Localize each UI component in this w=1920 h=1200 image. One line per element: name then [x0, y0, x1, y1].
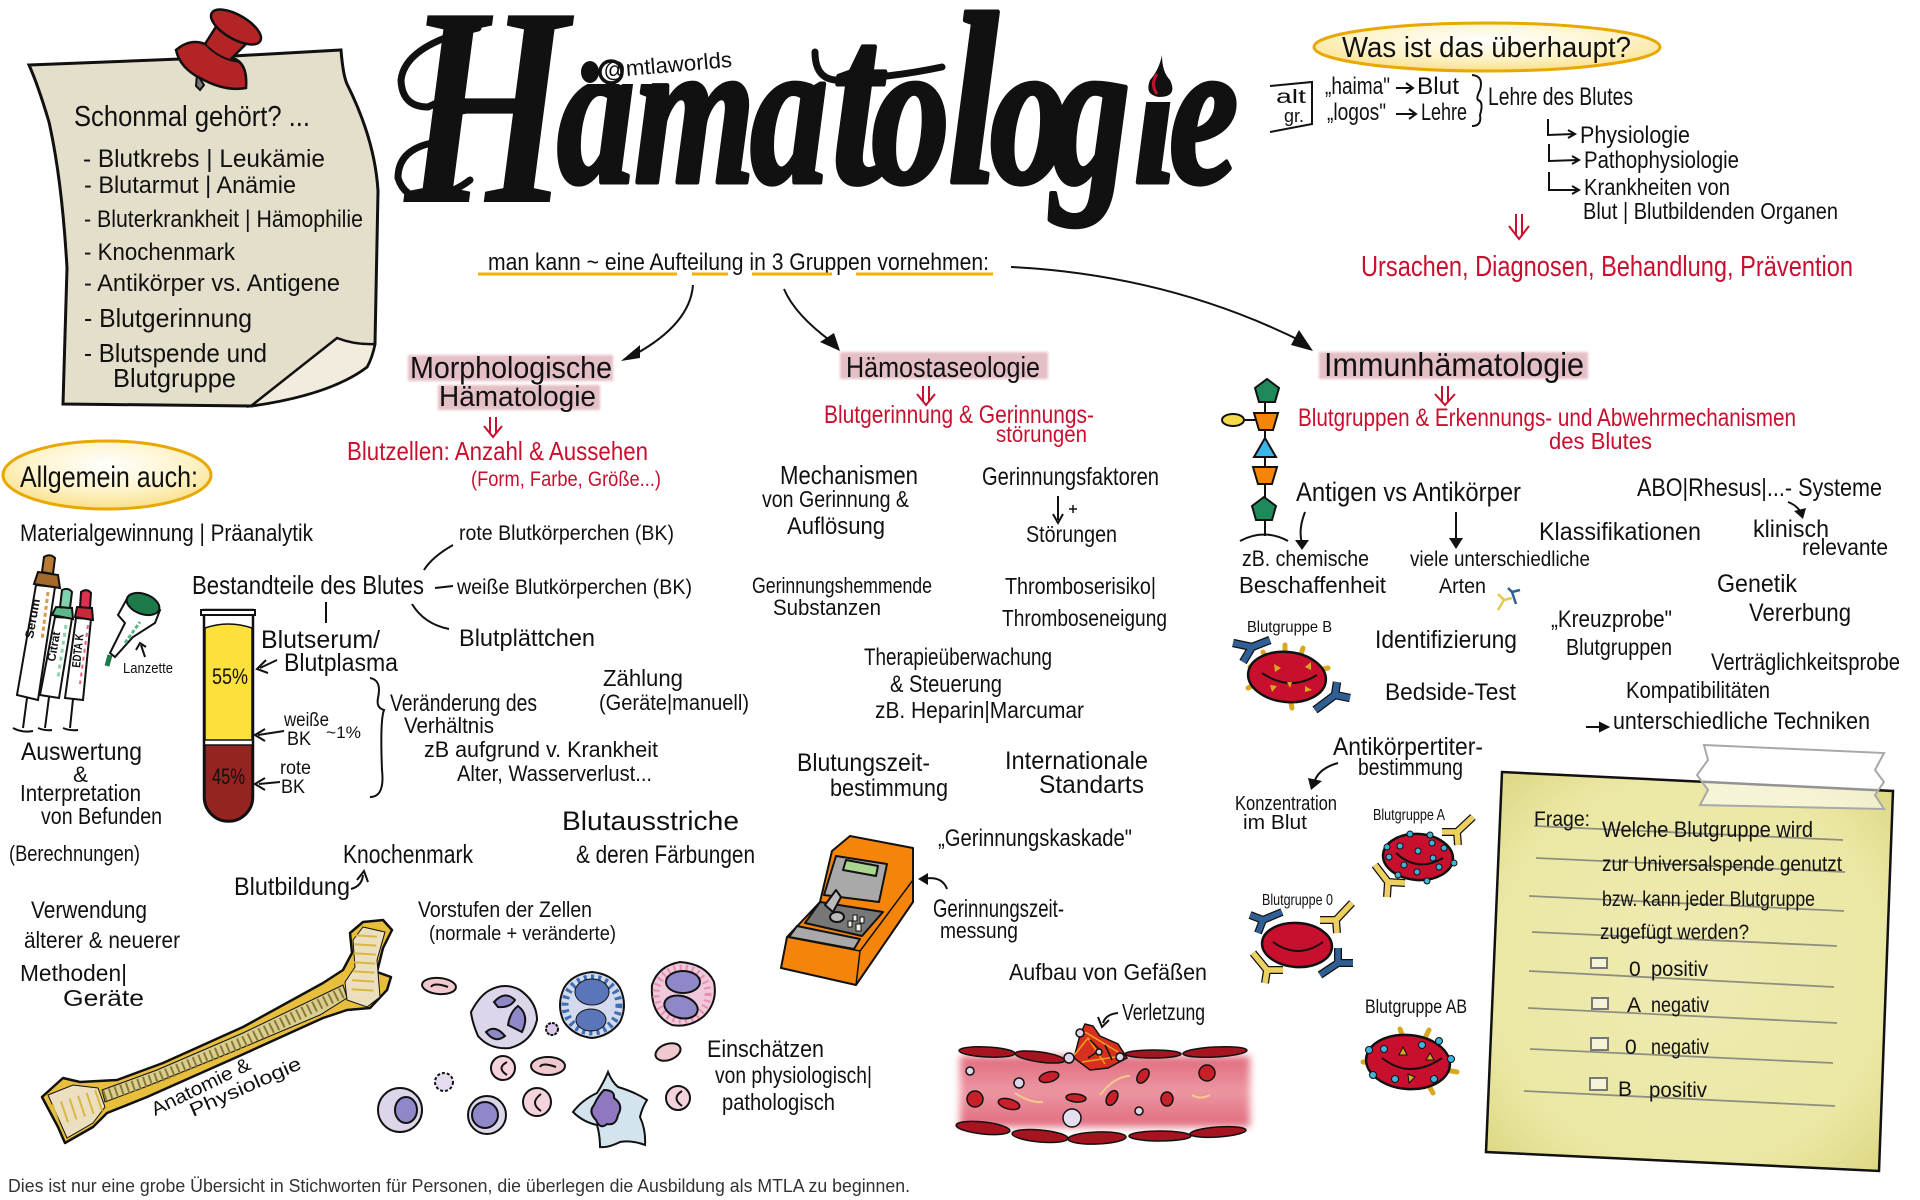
cell: platelet small	[546, 1023, 558, 1035]
Einschätzen	[707, 1036, 872, 1115]
Zählung	[599, 665, 749, 715]
Konzentration im Blut: Konzentration	[1235, 793, 1337, 815]
Klassifikationen: Klassifikationen	[1539, 518, 1701, 546]
note sheet	[1486, 772, 1893, 1171]
answer: 0 positiv: 0	[1629, 958, 1641, 981]
Antikörpertiter: bestimmung	[1358, 754, 1463, 780]
blood group B: Blutgruppe B	[1247, 619, 1332, 636]
klinisch relevante: relevante	[1802, 534, 1888, 560]
paper sheet	[29, 50, 378, 406]
Therapieüberwachung: & Steuerung	[890, 671, 1002, 698]
Gerinnungshemmende: Substanzen	[773, 595, 881, 620]
icon: blood test tube: 45%	[212, 764, 245, 789]
note list: - Blutarmut | Anämie	[84, 172, 296, 199]
Blutausstriche: Blutausstriche	[562, 806, 739, 836]
tube labels: ~1%	[326, 723, 361, 742]
blood components: weiße Blutkörperchen (BK)	[456, 576, 692, 599]
panel: question oval: Was ist das überhaupt?	[1342, 32, 1631, 64]
word logos	[1327, 99, 1467, 126]
branch list	[1548, 119, 1838, 224]
title: ogie	[990, 0, 1238, 227]
box alt gr: alt	[1276, 87, 1307, 108]
Einschätzen: Einschätzen	[707, 1036, 824, 1063]
blood components: rote Blutkörperchen (BK)	[459, 522, 674, 545]
question	[1534, 808, 1842, 944]
cell: lymphocyte 2	[468, 1096, 506, 1134]
Auswertung	[9, 738, 162, 866]
cell: lymphocyte	[378, 1088, 422, 1132]
note list	[83, 145, 363, 393]
tube Serum	[13, 555, 60, 732]
answer: A negativ: A	[1627, 994, 1641, 1017]
brace	[1472, 75, 1482, 126]
tube labels: Blutserum/	[261, 626, 380, 654]
cell: pink granulocyte	[652, 962, 715, 1026]
icon: push pin	[176, 3, 266, 90]
word logos: „logos"	[1327, 99, 1386, 126]
note list: - Blutkrebs | Leukämie	[83, 145, 325, 173]
tube labels	[255, 626, 398, 798]
Gerinnungsfaktoren: Gerinnungsfaktoren	[982, 463, 1159, 491]
red subtitle: (Form, Farbe, Größe...)	[471, 468, 661, 491]
Konzentration im Blut	[1235, 793, 1337, 834]
note heading: Schonmal gehört? ...	[74, 101, 310, 133]
answer: B positiv: B	[1618, 1078, 1632, 1101]
Gerinnungshemmende: Gerinnungshemmende	[752, 573, 932, 598]
panel: note Schonmal gehört	[29, 3, 378, 406]
answer: 0 negativ: negativ	[1651, 1036, 1709, 1059]
tube labels: Blutplasma	[284, 649, 398, 677]
column: Immunhämatologie	[8, 346, 1900, 1196]
footer note: Dies ist nur eine grobe Übersicht in Stichworten für Personen, die überlegen die Ausbildung als MTLA zu beginnen.	[8, 1176, 910, 1196]
bone label: Anatomie &	[148, 1054, 255, 1120]
arrow to Immunhämatologie	[1011, 267, 1313, 351]
Verletzung	[1098, 999, 1205, 1027]
Veränderung: Verhältnis	[404, 713, 494, 738]
answer: B positiv	[1590, 1078, 1707, 1102]
red subtitle	[824, 401, 1094, 447]
Verwendung: älterer & neuerer	[24, 927, 180, 953]
arrows down	[1295, 512, 1463, 550]
heading	[408, 350, 613, 413]
Internationale Standarts: Standarts	[1039, 771, 1144, 799]
cell: pink oval	[531, 1057, 565, 1075]
icon: blood collection tubes	[13, 555, 93, 732]
Kompatibilitäten: Kompatibilitäten	[1626, 677, 1770, 703]
box alt gr	[1270, 82, 1312, 132]
Blutungszeitbestimmung	[797, 749, 948, 802]
Gerinnungskaskade: „Gerinnungskaskade"	[938, 825, 1132, 852]
icon: small antibodies	[1498, 588, 1520, 610]
answer: A negativ: negativ	[1651, 994, 1709, 1017]
answer: 0 positiv	[1591, 958, 1708, 981]
Konzentration im Blut: im Blut	[1243, 812, 1307, 834]
branch list: Pathophysiologie	[1584, 147, 1739, 174]
Verwendung: Verwendung	[31, 897, 147, 924]
Therapieüberwachung: Therapieüberwachung	[864, 644, 1052, 671]
red subtitle: Blutzellen: Anzahl & Aussehen	[347, 436, 648, 466]
blood group AB	[1363, 997, 1467, 1093]
arrow to Hämostaseologie	[784, 289, 840, 351]
cell: platelet	[435, 1073, 453, 1091]
many types: Arten	[1439, 575, 1486, 598]
cell: monocyte	[573, 1072, 647, 1147]
Kreuzprobe: Blutgruppen	[1566, 634, 1672, 660]
red subtitle	[1298, 404, 1796, 454]
Gerinnungsfaktoren	[982, 463, 1159, 547]
Auswertung: Interpretation	[20, 780, 141, 806]
tape	[1697, 745, 1884, 809]
word haima: „haima"	[1325, 73, 1390, 100]
Blutungszeitbestimmung: bestimmung	[830, 775, 948, 802]
note list: - Antikörper vs. Antigene	[84, 270, 340, 297]
title: o	[872, 0, 949, 227]
tube labels: rote	[280, 758, 311, 779]
question: zugefügt werden?	[1600, 921, 1749, 944]
icon: lancet	[107, 589, 173, 677]
arrow to concentration	[1308, 763, 1338, 790]
Gerinnungszeitmessung	[933, 895, 1064, 943]
note list: - Blutgerinnung	[84, 303, 252, 333]
Bestandteile des Blutes: Bestandteile des Blutes	[192, 570, 424, 600]
Auswertung: &	[73, 762, 88, 787]
answer: 0 positiv: positiv	[1651, 958, 1708, 981]
Einschätzen: von physiologisch|	[715, 1062, 872, 1088]
branch list: Physiologie	[1580, 122, 1690, 149]
red subtitle: Blutgruppen & Erkennungs- und Abwehrmechanismen	[1298, 404, 1796, 432]
klinisch relevante: klinisch	[1753, 516, 1829, 543]
vessel wall top	[959, 1045, 1247, 1065]
icon: glycan chain	[1222, 379, 1288, 541]
Bedside-Test: Bedside-Test	[1385, 679, 1516, 706]
red down arrow	[917, 386, 935, 405]
heading: Morphologische	[410, 350, 612, 385]
box alt gr: gr.	[1284, 106, 1304, 126]
icon: blood test tube	[201, 610, 255, 822]
Therapieüberwachung	[864, 644, 1084, 723]
Thromboserisiko: Thromboserisiko|	[1005, 573, 1156, 599]
unterschiedliche Techniken: unterschiedliche Techniken	[1613, 708, 1870, 735]
Verwendung: Methoden|	[20, 960, 127, 986]
Veränderung: Veränderung des	[390, 690, 537, 717]
Gerinnungsfaktoren: Störungen	[1026, 521, 1117, 547]
column: Hämostaseologie	[752, 352, 1250, 1145]
masks above umlaut and i	[572, 30, 1178, 102]
cell: lilac leukocyte	[471, 986, 537, 1048]
blood cells group	[378, 962, 715, 1147]
Kreuzprobe	[1551, 606, 1672, 660]
folded corner	[251, 338, 375, 406]
Auswertung: Auswertung	[21, 738, 142, 766]
cells in lumen	[966, 1065, 1215, 1127]
word haima	[1325, 73, 1459, 100]
note list: Blutgruppe	[113, 363, 236, 393]
ruled lines	[1524, 826, 1845, 1106]
connector lines	[326, 545, 453, 629]
cell: pink oval 2	[653, 1040, 683, 1064]
question: Frage:	[1534, 808, 1590, 831]
clot	[1064, 1024, 1127, 1070]
blood components: Blutplättchen	[459, 625, 595, 652]
question: Welche Blutgruppe wird	[1602, 817, 1813, 842]
bone label	[148, 1054, 305, 1122]
Antigen vs Antikörper: Antigen vs Antikörper	[1296, 477, 1521, 507]
cell: red oval	[421, 977, 457, 995]
Internationale Standarts	[1005, 747, 1148, 799]
Systeme: ABO|Rhesus|...- Systeme	[1637, 474, 1882, 502]
many types	[1410, 548, 1590, 598]
arrow to Morphologische Hämatologie	[621, 285, 693, 361]
red down arrow	[1435, 386, 1455, 405]
Mechanismen	[762, 460, 918, 540]
Einschätzen: pathologisch	[722, 1089, 835, 1115]
question: bzw. kann jeder Blutgruppe	[1602, 888, 1815, 911]
Genetik Vererbung: Vererbung	[1749, 599, 1851, 627]
vessel illustration	[956, 1024, 1250, 1145]
tube labels: BK	[287, 729, 311, 750]
cell: pink round 2	[523, 1088, 551, 1116]
red down arrow	[1509, 214, 1529, 239]
Gerinnungszeitmessung: Gerinnungszeit-	[933, 895, 1064, 923]
Blutausstriche: & deren Färbungen	[576, 841, 755, 869]
Zählung: (Geräte|manuell)	[599, 690, 749, 715]
answer: A negativ	[1592, 994, 1709, 1017]
Mechanismen: von Gerinnung &	[762, 486, 909, 512]
Thromboserisiko	[1002, 573, 1167, 631]
tube Serum: Serum	[22, 598, 43, 640]
Blutbildung: Blutbildung	[234, 873, 350, 901]
tube labels: weiße	[283, 710, 329, 731]
heading: Hämostaseologie	[846, 352, 1040, 384]
Veränderung	[390, 690, 658, 786]
answer: 0 negativ: 0	[1625, 1036, 1637, 1059]
Auswertung: (Berechnungen)	[9, 841, 140, 866]
Internationale Standarts: Internationale	[1005, 747, 1148, 775]
answer: 0 negativ	[1591, 1036, 1709, 1059]
panel: question oval	[1314, 23, 1660, 71]
tube EDTA	[63, 590, 93, 730]
blood lumen	[960, 1056, 1250, 1127]
heading: Hämatologie	[439, 381, 596, 413]
branch list: Krankheiten von	[1584, 174, 1730, 200]
Mechanismen: Mechanismen	[780, 460, 918, 490]
red subtitle	[347, 436, 661, 491]
Identifizierung: Identifizierung	[1375, 626, 1517, 654]
Therapieüberwachung: zB. Heparin|Marcumar	[875, 697, 1084, 723]
Kreuzprobe: „Kreuzprobe"	[1551, 606, 1672, 633]
tube EDTA: EDTA K	[69, 633, 87, 668]
Vorstufen: (normale + veränderte)	[429, 923, 616, 945]
Auswertung: von Befunden	[41, 803, 162, 829]
panel: Allgemein oval: Allgemein auch:	[20, 461, 198, 494]
Vorstufen: Vorstufen der Zellen	[418, 897, 592, 922]
column: Morphologische Hämatologie	[9, 350, 872, 1147]
word haima: Blut	[1417, 73, 1459, 100]
blood group 0	[1250, 892, 1353, 983]
Lehre des Blutes: Lehre des Blutes	[1488, 83, 1633, 111]
Genetik Vererbung	[1717, 570, 1851, 627]
Verletzung: Verletzung	[1122, 999, 1205, 1025]
heading: Immunhämatologie	[1324, 346, 1584, 383]
intro sentence: man kann ~ eine Aufteilung in 3 Gruppen vornehmen:	[488, 249, 989, 276]
tube Citrat	[38, 589, 73, 730]
Gerinnungshemmende	[752, 573, 932, 620]
tube Citrat: Citrat	[44, 631, 63, 663]
blood group B	[1233, 619, 1350, 710]
question: zur Universalspende genutzt	[1602, 853, 1842, 876]
blood group AB: Blutgruppe AB	[1365, 997, 1467, 1018]
icon: blood test tube: 55%	[212, 664, 248, 689]
Verwendung	[20, 897, 180, 1011]
note list: - Blutspende und	[84, 338, 267, 368]
icon: blood drop	[1148, 55, 1172, 97]
Verwendung: Geräte	[63, 985, 144, 1011]
Vorstufen	[418, 897, 616, 945]
Veränderung: Alter, Wasserverlust...	[457, 761, 652, 786]
blood group A: Blutgruppe A	[1373, 807, 1445, 824]
handle @mtlaworlds: @mtlaworlds	[602, 47, 733, 83]
panel: etymology	[1270, 73, 1853, 283]
red subtitle: des Blutes	[1549, 428, 1652, 454]
note list: - Knochenmark	[84, 239, 236, 266]
blood group 0: Blutgruppe 0	[1262, 892, 1333, 909]
title: äma	[557, 0, 828, 227]
red subtitle: Blutgerinnung & Gerinnungs-	[824, 401, 1094, 429]
Thromboserisiko: Thromboseneigung	[1002, 605, 1167, 631]
Antikörpertiter	[1333, 733, 1483, 780]
Blutungszeitbestimmung: Blutungszeit-	[797, 749, 930, 777]
chemical nature	[1239, 546, 1387, 598]
cell: pink round 3	[666, 1086, 690, 1110]
branch list: Blut | Blutbildenden Organen	[1583, 198, 1838, 224]
Veränderung: zB aufgrund v. Krankheit	[424, 737, 658, 762]
Genetik Vererbung: Genetik	[1717, 570, 1797, 598]
Blutausstriche	[562, 806, 755, 869]
Antikörpertiter: Antikörpertiter-	[1333, 733, 1483, 761]
word logos: Lehre	[1421, 99, 1467, 126]
arrow to device	[918, 873, 947, 889]
answer: B positiv: positiv	[1649, 1079, 1707, 1102]
Gerinnungszeitmessung: messung	[940, 918, 1018, 943]
Zählung: Zählung	[603, 665, 683, 691]
icon: bone	[42, 920, 392, 1143]
bone label: Physiologie	[186, 1054, 305, 1122]
blood group A	[1373, 807, 1473, 897]
red down arrow	[484, 417, 502, 437]
panel: Allgemein oval	[3, 441, 211, 509]
Aufbau von Gefäßen: Aufbau von Gefäßen	[1009, 959, 1207, 985]
note list: - Bluterkrankheit | Hämophilie	[84, 206, 363, 233]
cell: blue granulocyte	[560, 972, 624, 1038]
title swashes	[398, 28, 942, 198]
Systeme	[1637, 474, 1882, 519]
icon: coagulation device	[781, 836, 913, 985]
cell: pink round	[491, 1056, 515, 1080]
klinisch relevante	[1753, 516, 1888, 560]
Mechanismen: Auflösung	[787, 513, 885, 540]
chemical nature: zB. chemische	[1242, 546, 1369, 571]
chemical nature: Beschaffenheit	[1239, 572, 1387, 598]
Knochenmark: Knochenmark	[343, 839, 474, 869]
Materialgewinnung: Materialgewinnung | Präanalytik	[20, 520, 314, 547]
many types: viele unterschiedliche	[1410, 548, 1590, 571]
red subtitle: störungen	[996, 421, 1087, 447]
vessel wall bottom	[956, 1119, 1246, 1145]
tube labels: BK	[281, 777, 305, 798]
blood components	[456, 522, 692, 652]
sticky note: quiz	[1486, 745, 1893, 1171]
icon: lancet: Lanzette	[123, 660, 173, 677]
brace	[370, 678, 384, 797]
